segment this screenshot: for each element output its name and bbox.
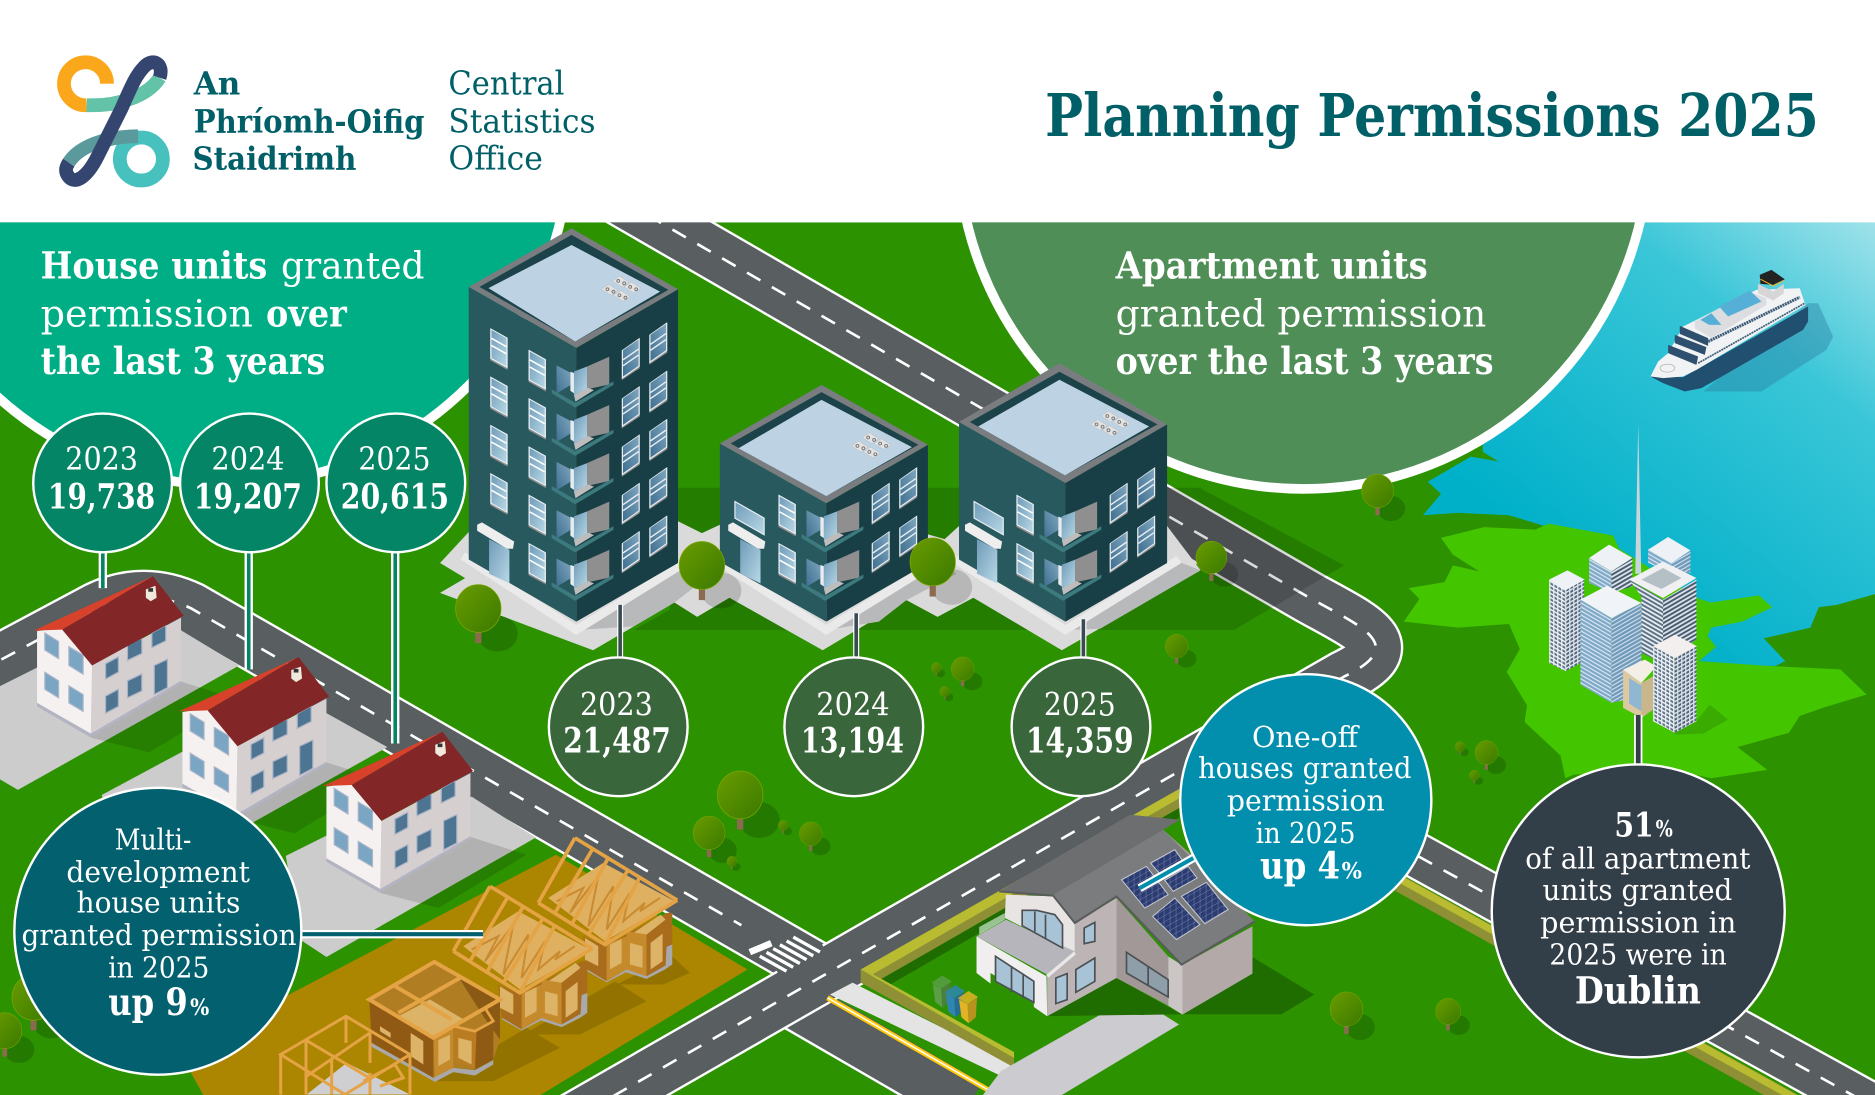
heading: apartment units: granted permission <box>1116 292 1486 335</box>
Dublin towers <box>1549 537 1728 735</box>
connectors: apartment units <box>620 605 1083 660</box>
crossing <box>750 937 820 971</box>
callout: multi-development houses: granted permission <box>22 918 297 952</box>
connector: Dublin <box>1635 715 1642 771</box>
solar panels <box>1121 850 1228 940</box>
tower: small tan <box>1623 660 1656 718</box>
stat bubble: apartments 2025: 14,359 <box>1026 722 1134 762</box>
callout: multi-development houses: up 9 <box>108 980 188 1024</box>
callout: Dublin share: 2025 were in <box>1549 938 1727 972</box>
connector: one-off <box>1140 850 1208 888</box>
logo text: English <box>448 64 596 178</box>
panel: house units circle <box>0 0 569 485</box>
stat bubble: houses 2024: 19,207 <box>194 478 302 518</box>
road: long central road with bend <box>538 186 1376 1095</box>
callout: multi-development houses <box>14 788 301 1075</box>
callout: Dublin share: 51 <box>1614 805 1654 844</box>
building plot: timber-frame lot <box>179 855 747 1095</box>
sea <box>1423 222 1875 666</box>
road: lower junction <box>765 987 969 1095</box>
callout: Dublin share <box>1492 764 1785 1057</box>
tower: back middle <box>1589 545 1632 593</box>
callout: multi-development houses: Multi- <box>115 823 191 857</box>
frame: skeleton stage <box>281 1016 410 1094</box>
one-off house plot <box>827 789 1314 1095</box>
heading: apartment units <box>1115 244 1494 383</box>
logo <box>64 62 596 181</box>
heading: house units: granted <box>281 245 425 288</box>
callout: multi-development houses: house units <box>77 886 240 920</box>
heading: apartment units: over the last 3 years <box>1116 339 1494 383</box>
logo text: Irish: Staidrimh <box>193 141 356 178</box>
bins <box>932 975 978 1023</box>
stat bubble: apartments 2024: 2024 <box>816 687 890 723</box>
frame shadows <box>437 956 690 1081</box>
roof <box>999 815 1255 965</box>
callout: one-off houses: permission <box>1227 783 1385 817</box>
connectors: house units <box>103 544 395 744</box>
callout: multi-development houses: development <box>66 855 250 889</box>
stat bubble: houses 2023: 2023 <box>65 442 138 478</box>
panel: apartment units circle <box>958 0 1649 489</box>
Dublin spire <box>1635 423 1641 574</box>
stat bubble: houses 2025: 20,615 <box>341 478 449 518</box>
background: grass <box>0 222 1875 1095</box>
apartment block 2024 <box>720 385 928 622</box>
tower: left <box>1549 570 1585 671</box>
windows <box>996 910 1168 1004</box>
stat bubble: apartments 2025 <box>1012 657 1150 796</box>
tower: front right <box>1653 635 1697 733</box>
tower: back right <box>1648 537 1690 573</box>
callout: one-off houses: houses granted <box>1198 751 1412 785</box>
heading: house units: permission <box>41 292 253 335</box>
callout: Dublin share: permission in <box>1540 905 1736 939</box>
stat bubble: apartments 2023: 2023 <box>580 687 653 723</box>
walls <box>977 830 1252 1016</box>
logo text: English: Central <box>448 64 564 102</box>
stat bubble: apartments 2023: 21,487 <box>563 722 671 762</box>
apartment block 2025 <box>959 363 1167 622</box>
stat bubble: houses 2023 <box>33 414 172 552</box>
heading: house units: the last 3 years <box>41 339 325 383</box>
heading: house units <box>41 244 425 383</box>
callout: one-off houses: up 4 <box>1260 844 1340 888</box>
tower: right wide <box>1629 561 1696 663</box>
stat bubble: apartments 2023 <box>549 657 688 796</box>
stat bubble: houses 2024 <box>180 414 319 552</box>
one-off house <box>977 815 1255 1016</box>
stat bubble: apartments 2024: 13,194 <box>801 722 904 762</box>
logo text: Irish: An <box>193 65 240 102</box>
timber frame with roof, front <box>453 886 592 1031</box>
stat bubble: apartments 2024 <box>784 657 923 796</box>
logo text: English: Office <box>448 140 543 178</box>
callout: multi-development houses: % <box>190 995 210 1021</box>
heading: apartment units: Apartment units <box>1115 244 1428 288</box>
cruise ship <box>1650 270 1833 391</box>
callout: Dublin share: units granted <box>1543 873 1732 907</box>
stat bubble: houses 2024: 2024 <box>211 442 285 478</box>
heading: house units: House units <box>41 244 267 288</box>
stat bubble: houses 2023: 19,738 <box>48 478 155 518</box>
callout: Dublin share: % <box>1656 816 1673 842</box>
stat bubble: houses 2025: 2025 <box>358 442 430 478</box>
road: left diagonal road <box>0 597 837 980</box>
land: Dublin area <box>1404 524 1867 778</box>
callout: one-off houses: % <box>1342 859 1362 885</box>
stat bubble: houses 2025 <box>326 414 465 552</box>
connector: multi-development <box>293 931 483 938</box>
frame: walls stage <box>369 962 500 1082</box>
callout: multi-development houses: in 2025 <box>108 950 209 984</box>
callout: one-off houses <box>1180 674 1431 925</box>
paving under apartment blocks <box>440 521 1201 650</box>
road: right side with hedge <box>1268 773 1875 1095</box>
tower shadow <box>1653 705 1728 735</box>
house plots <box>0 630 536 957</box>
building shadow <box>634 488 1344 630</box>
logo mark <box>64 62 163 181</box>
timber frame with roof, rear <box>538 838 677 982</box>
callout: one-off houses: in 2025 <box>1256 816 1355 850</box>
header band <box>0 0 1875 222</box>
callout: Dublin share: Dublin <box>1575 969 1701 1013</box>
houses <box>33 576 527 908</box>
logo text: Irish: Phríomh-Oifig <box>194 104 425 141</box>
callout: Dublin share: of all apartment <box>1525 842 1751 876</box>
apartment block 2023 <box>469 228 678 622</box>
logo text: Irish <box>193 65 425 178</box>
trees <box>0 474 1506 1063</box>
tower: front large <box>1580 586 1641 703</box>
timber-frame houses <box>281 838 690 1094</box>
junction openings <box>777 946 826 1024</box>
callout: one-off houses: One-off <box>1252 720 1361 754</box>
stat bubble: apartments 2025: 2025 <box>1044 687 1116 723</box>
logo text: English: Statistics <box>448 103 596 141</box>
heading: house units: over <box>266 291 347 335</box>
